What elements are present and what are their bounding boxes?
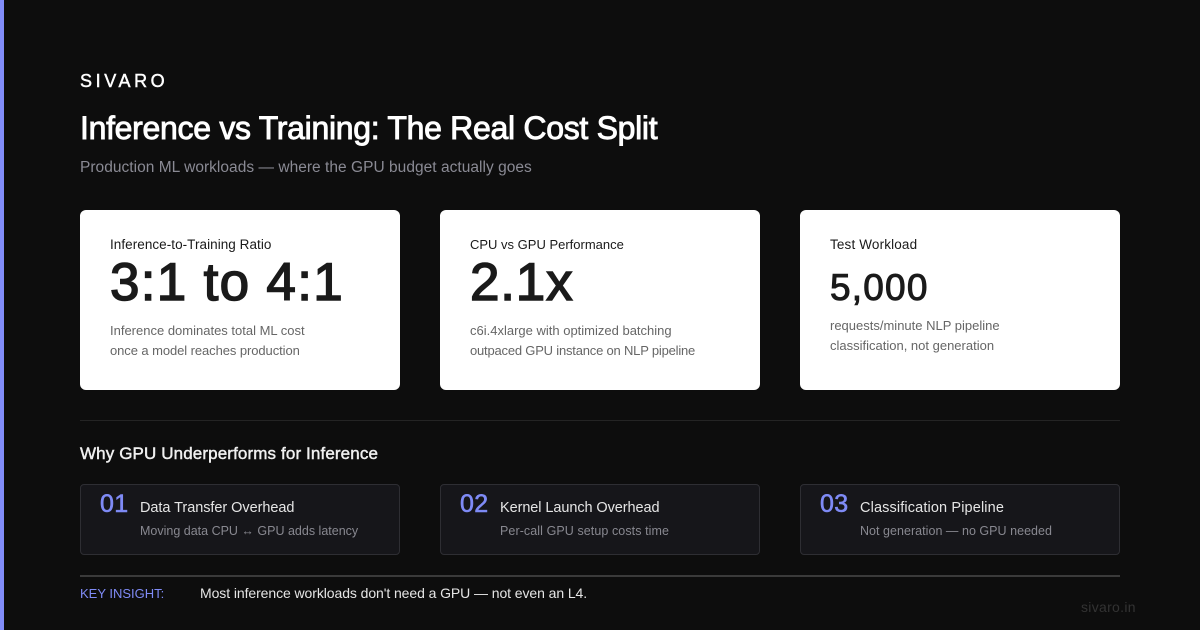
panel: reason 3 [800,484,1120,555]
card description: once a model reaches production [110,343,300,358]
number: 02 [460,490,489,518]
card description [470,323,695,358]
card label: Test Workload [830,237,917,252]
big stat: 3:1 to 4:1 [110,253,344,312]
card description [830,318,1000,353]
reason detail: Not generation — no GPU needed [860,524,1052,538]
subtitle: Production ML workloads — where the GPU budget actually goes [80,159,532,176]
reason detail: Moving data CPU ↔ GPU adds latency [140,524,358,538]
big stat: 5,000 [830,267,929,308]
title: Inference vs Training: The Real Cost Split [80,110,657,146]
card description: requests/minute NLP pipeline [830,318,1000,333]
panel: reason 2 [440,484,760,555]
divider [80,420,1120,421]
divider [80,575,1120,577]
reason detail: Per-call GPU setup costs time [500,524,669,538]
card description: c6i.4xlarge with optimized batching [470,323,672,338]
panel: test workload [800,210,1120,390]
key insight label: KEY INSIGHT: [80,586,164,601]
key insight text: Most inference workloads don't need a GPU — not even an L4. [200,585,587,601]
card description: outpaced GPU instance on NLP pipeline [470,343,695,358]
brand wordmark: SIVARO [80,71,168,91]
reason title: Classification Pipeline [860,500,1004,516]
number: 01 [100,490,129,518]
big stat: 2.1x [470,253,573,312]
section heading: Why GPU Underperforms for Inference [80,444,378,463]
reason title: Data Transfer Overhead [140,500,294,516]
footer url: sivaro.in [1081,599,1136,615]
card label: CPU vs GPU Performance [470,237,624,252]
panel: inference-to-training ratio [80,210,400,390]
card label: Inference-to-Training Ratio [110,237,271,252]
card description [110,323,305,358]
panel: CPU vs GPU performance [440,210,760,390]
panel: reason 1 [80,484,400,555]
card description: Inference dominates total ML cost [110,323,305,338]
card description: classification, not generation [830,338,994,353]
accent bar [0,0,4,630]
number: 03 [820,490,849,518]
reason title: Kernel Launch Overhead [500,500,659,516]
